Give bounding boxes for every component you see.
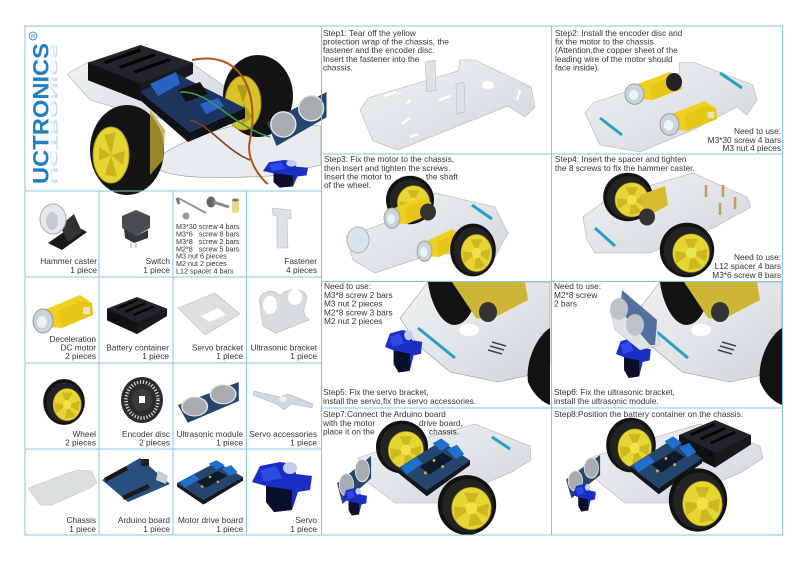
step text: leading wire of the motor should [555, 54, 673, 64]
panel: switch [122, 210, 170, 275]
panel: motor drive board: Motor drive board [178, 515, 243, 525]
panel: motor drive board [177, 460, 243, 534]
ultrasonic bracket and module [610, 290, 660, 350]
panel: chassis: Chassis [66, 515, 96, 525]
panel: step 6 [554, 281, 782, 406]
step text: install the ultrasonic module. [554, 396, 659, 406]
step text [555, 28, 683, 72]
icon: brand logo UCTRONICS: UCTRONICS [47, 43, 60, 184]
icon: servo horn [253, 391, 313, 410]
panel: chassis [28, 470, 97, 534]
parts needed: M3*6 screw 8 bars [712, 270, 781, 280]
rear wheel [376, 421, 428, 473]
panel: screws and spacers: M3*30 screw 4 bars [176, 222, 240, 231]
hole [691, 324, 711, 336]
decal mark [492, 437, 510, 449]
icon: ultrasonic bracket [259, 289, 309, 333]
parts needed: M2*8 screw 3 bars [324, 308, 393, 318]
ultrasonic module [337, 456, 371, 504]
decal mark [418, 328, 455, 358]
illustration: chassis close-up [400, 282, 550, 382]
panel: servo accessories: Servo accessories [249, 429, 317, 439]
panel: switch: Switch [146, 256, 170, 266]
panel: screws and spacers: M3*6 screw 8 bars [176, 230, 240, 238]
parts needed: M2 nut 2 pieces [324, 316, 383, 326]
panel: battery container [106, 297, 169, 361]
parts needed: M3 nut 4 pieces [722, 143, 781, 153]
step text: the shaft [426, 172, 459, 182]
step text: fix the motor to the chassis. [555, 36, 656, 46]
encoder disc [639, 208, 655, 226]
motor drive board [140, 72, 245, 142]
panel: Arduino board: 1 piece [143, 524, 170, 534]
icon: encoder disc [121, 377, 163, 423]
panel: battery container: Battery container [106, 342, 169, 352]
decal marks [600, 73, 742, 135]
step text: then insert and tighten the screws. [324, 163, 450, 173]
illustration: chassis [358, 424, 531, 503]
parts needed: M3 nut 2 pieces [324, 298, 383, 308]
panel: ultrasonic module [177, 382, 243, 448]
panel: screws and spacers: M3 nut 6 pieces [176, 252, 227, 260]
panel: ultrasonic module: 1 piece [216, 438, 243, 448]
step text [323, 387, 476, 406]
step text: Step2: Install the encoder disc and [555, 28, 683, 38]
illustration: chassis [585, 62, 757, 152]
parts needed: 2 bars [554, 298, 577, 308]
spacers [706, 185, 735, 215]
step text: Step4: Insert the spacer and tighten [555, 154, 687, 164]
step text: the 8 screws to fix the hammer caster. [555, 163, 695, 173]
step text: Step5: Fix the servo bracket, [323, 387, 429, 397]
step text: Step8:Position the battery container on the chassis. [554, 409, 743, 419]
decal mark [472, 205, 492, 219]
panel: deceleration motor [33, 295, 96, 361]
step text: install the servo,fix the servo accessories. [323, 396, 476, 406]
parts needed: M3*30 screw 4 bars [708, 135, 781, 145]
icon: servo [252, 462, 312, 512]
parts needed: M3*8 screw 2 bars [324, 290, 393, 300]
icon: screws, nut, spacer [177, 196, 239, 220]
panel: fastener [272, 208, 317, 275]
parts needed: Need to use: [734, 252, 781, 262]
front wheel [760, 328, 782, 405]
parts needed [708, 126, 781, 153]
illustration: chassis [346, 193, 508, 273]
panel: encoder disc: 2 pieces [139, 438, 170, 448]
panel: servo bracket: 1 piece [216, 351, 243, 361]
encoder disc upper [666, 73, 682, 91]
step text: Insert the fastener into the [323, 54, 420, 64]
panel: step 5 [323, 281, 550, 406]
step text [322, 409, 463, 436]
motor lower [660, 101, 717, 135]
panel: deceleration motor: DC motor [60, 342, 96, 352]
step text: with the motor [322, 418, 375, 428]
step text [324, 154, 459, 190]
illustration: chassis [583, 173, 751, 253]
motor drive board [398, 439, 470, 496]
panel: hero photo of assembled car [28, 32, 327, 195]
step text [555, 154, 695, 173]
step text: drive board, [419, 418, 463, 428]
rear wheel [223, 55, 293, 137]
hammer caster [347, 227, 369, 253]
panel: step 4 [555, 154, 781, 280]
ultrasonic sensor [267, 92, 327, 146]
encoder disc [420, 204, 436, 220]
icon: caster [40, 204, 87, 250]
step text: chassis. [323, 62, 353, 72]
parts needed [554, 281, 601, 308]
rear wheel [660, 282, 710, 325]
rear wheel [386, 176, 434, 224]
icon: ultrasonic module [178, 382, 239, 423]
wires [192, 58, 268, 184]
panel: ultrasonic bracket: 1 piece [290, 351, 317, 361]
panel: servo bracket: Servo bracket [192, 342, 244, 352]
icon: chassis [28, 470, 97, 505]
panel: ultrasonic bracket [251, 289, 318, 361]
step text: Step7:Connect the Arduino board [323, 409, 446, 419]
decal mark [657, 332, 688, 358]
illustration: chassis [590, 424, 763, 503]
decal mark [595, 228, 615, 246]
step text: of the wheel. [324, 180, 371, 190]
parts needed: Need to use: [734, 126, 781, 136]
step text: Step3: Fix the motor to the chassis, [324, 154, 454, 164]
step text: face inside). [555, 62, 600, 72]
illustration: chassis with fasteners [360, 60, 535, 150]
panel: step 3 [324, 154, 508, 276]
icon: servo bracket [178, 293, 240, 335]
step text: Step6: Fix the ultrasonic bracket, [554, 387, 675, 397]
panel: Arduino board [102, 458, 170, 534]
servo [385, 330, 422, 372]
panel: encoder disc: Encoder disc [122, 429, 170, 439]
parts needed [712, 252, 781, 280]
panel: hammer caster: Hammer caster [40, 256, 97, 266]
icon: Arduino board [102, 458, 170, 502]
step text [323, 28, 449, 72]
step text: (Attention,the copper sheet of the [555, 45, 678, 55]
rear plate [67, 62, 230, 125]
motor drive board [630, 437, 702, 494]
panel: switch: 1 piece [143, 265, 170, 275]
panel: wheel [43, 379, 96, 448]
servo [343, 488, 367, 516]
panel: screws and spacers: M2 nut 2 pieces [176, 259, 227, 268]
panel: wheel: Wheel [72, 429, 96, 439]
hole [459, 324, 479, 336]
step text: place it on the [323, 426, 375, 436]
panel: screws and spacers: M2*8 screw 5 bars [176, 244, 240, 254]
panel: fastener: Fastener [284, 256, 317, 266]
panel: servo bracket [178, 293, 244, 361]
icon: fastener [272, 208, 291, 248]
icon: motor [33, 295, 93, 333]
panel: chassis: 1 piece [69, 524, 96, 534]
panel: screws and spacers: L12 spacer 4 bars [176, 266, 234, 276]
panel: hammer caster: 1 piece [70, 265, 97, 275]
parts needed: M2*8 screw [554, 290, 598, 300]
icon: brand logo UCTRONICS: UCTRONICS [28, 43, 54, 184]
slots [718, 342, 736, 354]
panel: fastener: 4 pieces [286, 265, 317, 275]
icon: brand logo UCTRONICS [28, 32, 60, 184]
motor upper [625, 72, 682, 104]
ultrasonic module [566, 455, 600, 498]
panel: step 2 [555, 28, 781, 153]
rear wheel [606, 418, 656, 472]
panel: servo accessories: 1 piece [290, 438, 317, 448]
front wheel [450, 224, 496, 276]
panel: screws and spacers: M3*8 screw 2 bars [176, 237, 240, 246]
panel: step 1 [323, 28, 535, 150]
panel: servo accessories [249, 391, 317, 448]
panel: step 8 [554, 409, 763, 532]
front wheel [669, 468, 727, 532]
step text: protection wrap of the chassis, the [323, 36, 449, 46]
front plate [154, 122, 321, 178]
motor [640, 186, 668, 218]
step text [554, 387, 675, 406]
panel: ultrasonic bracket: Ultrasonic bracket [251, 342, 318, 352]
panel: servo: 1 piece [290, 524, 317, 534]
parts needed [324, 281, 393, 326]
front wheel [660, 223, 714, 277]
panel: hammer caster [40, 204, 97, 275]
front wheel [438, 475, 496, 535]
icon: battery holder [107, 297, 167, 334]
parts needed: Need to use: [554, 281, 601, 291]
servo [263, 160, 308, 188]
step text: Step1: Tear off the yellow [323, 28, 417, 38]
rear wheel [603, 173, 653, 221]
motor [684, 282, 760, 320]
panel: motor drive board: 1 piece [216, 524, 243, 534]
panel: Arduino board: Arduino board [118, 515, 170, 525]
panel: wheel: 2 pieces [65, 438, 96, 448]
step text: fastener and the encoder disc. [323, 45, 435, 55]
panel: battery container: 1 piece [142, 351, 169, 361]
front motor [417, 229, 462, 261]
step text: chassis. [429, 426, 459, 436]
panel: step 7 [322, 409, 531, 535]
illustration: chassis close-up [632, 282, 782, 382]
icon: brand logo UCTRONICS: R [31, 34, 36, 40]
battery container [679, 420, 751, 468]
slots [488, 342, 506, 354]
panel: servo [252, 462, 317, 534]
encoder disc [479, 302, 497, 322]
panel: encoder disc [121, 377, 170, 448]
icon: switch [122, 210, 150, 248]
servo [573, 484, 596, 512]
rear wheel [428, 282, 478, 325]
icon: wheel [43, 379, 85, 425]
panel: servo: Servo [295, 515, 317, 525]
panel: screws and spacers [176, 196, 240, 276]
parts needed: L12 spacer 4 bars [715, 261, 781, 271]
encoder disc [711, 302, 729, 322]
step text: Insert the motor to [324, 172, 392, 182]
servo [616, 338, 651, 378]
panel: deceleration motor: 2 pieces [65, 351, 96, 361]
rear motor [384, 196, 432, 228]
battery container [88, 45, 193, 101]
panel: ultrasonic module: Ultrasonic module [177, 429, 243, 439]
icon: motor drive board [177, 460, 243, 505]
front wheel [90, 105, 165, 195]
motor [452, 282, 528, 320]
panel: deceleration motor: Deceleration [49, 334, 96, 344]
front wheel [528, 328, 550, 405]
parts needed: Need to use: [324, 281, 371, 291]
